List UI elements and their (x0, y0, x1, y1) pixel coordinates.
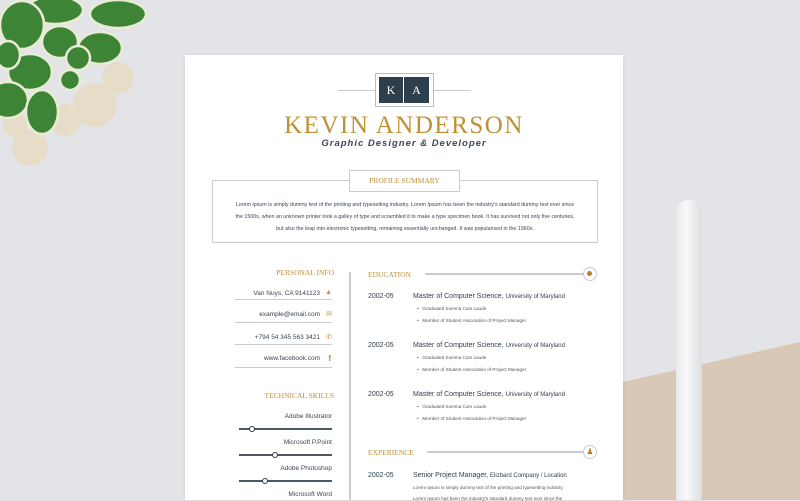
education: • Graduated Summa Cum Laude (417, 355, 486, 360)
plant decoration (0, 0, 148, 166)
education: 2002-05 (368, 391, 394, 398)
personal info: ✉ (326, 311, 332, 318)
personal info: www.facebook.com (264, 355, 320, 362)
experience: Lorem Ipsum is simply dummy text of the printing and typesetting industry. (413, 485, 564, 490)
experience: 2002-05 (368, 472, 394, 479)
education: 2002-05 (368, 342, 394, 349)
personal info: example@email.com (259, 311, 320, 318)
education: • Member of Student Association of Project Manager (417, 367, 526, 372)
personal info: ✆ (326, 334, 332, 341)
technical skills: Adobe Illustrator (285, 413, 332, 420)
experience: EXPERIENCE (368, 448, 414, 457)
monogram: K (387, 83, 395, 97)
education: • Member of Student Association of Project Manager (417, 416, 526, 421)
profile summary (212, 180, 598, 243)
monogram (338, 73, 471, 107)
experience: Senior Project Manager, Elizbard Company / Location (413, 472, 567, 479)
experience (368, 445, 597, 501)
monogram: A (412, 83, 421, 97)
personal info: PERSONAL INFO (276, 268, 334, 277)
profile summary: Lorem Ipsum is simply dummy text of the printing and typesetting industry. Lorem Ipsum has been the industry's standard dummy text ever since (236, 202, 574, 208)
personal info: f (328, 354, 331, 363)
experience: ♟ (586, 447, 594, 456)
subtitle: Graphic Designer & Developer (321, 138, 487, 149)
personal info (235, 268, 334, 368)
personal info: +794 54 345 563 3421 (255, 334, 320, 341)
name: KEVIN ANDERSON (284, 112, 524, 139)
education: Master of Computer Science, University of Maryland (413, 391, 565, 398)
profile summary: the 1500s, when an unknown printer took a galley of type and scrambled it to make a type specimen book. It has survived not only five centuries, (236, 214, 574, 220)
education: 2002-05 (368, 293, 394, 300)
rod (676, 200, 702, 500)
personal info: Van Nuys, CA 9141123 (253, 290, 320, 297)
personal info: ▲ (325, 289, 332, 296)
experience: Lorem Ipsum has been the industry's standard dummy text ever since the (413, 496, 562, 501)
technical skills: TECHNICAL SKILLS (264, 391, 334, 400)
education: • Member of Student Association of Project Manager (417, 318, 526, 323)
technical skills: Microsoft P.Point (284, 439, 332, 446)
education: Master of Computer Science, University of Maryland (413, 342, 565, 349)
divider (349, 272, 351, 500)
education: • Graduated Summa Cum Laude (417, 404, 486, 409)
technical skills: Microsoft Word (288, 491, 332, 498)
technical skills: Adobe Photoshop (280, 465, 332, 472)
education: EDUCATION (368, 270, 411, 279)
education: • Graduated Summa Cum Laude (417, 306, 486, 311)
technical skills (239, 391, 334, 498)
profile summary: PROFILE SUMMARY (369, 176, 440, 185)
resume paper (185, 55, 623, 500)
profile summary: but also the leap into electronic typesetting, remaining essentially unchanged. It was popularised in the 1960s. (276, 226, 534, 232)
education: Master of Computer Science, University of Maryland (413, 293, 565, 300)
education (368, 267, 597, 421)
